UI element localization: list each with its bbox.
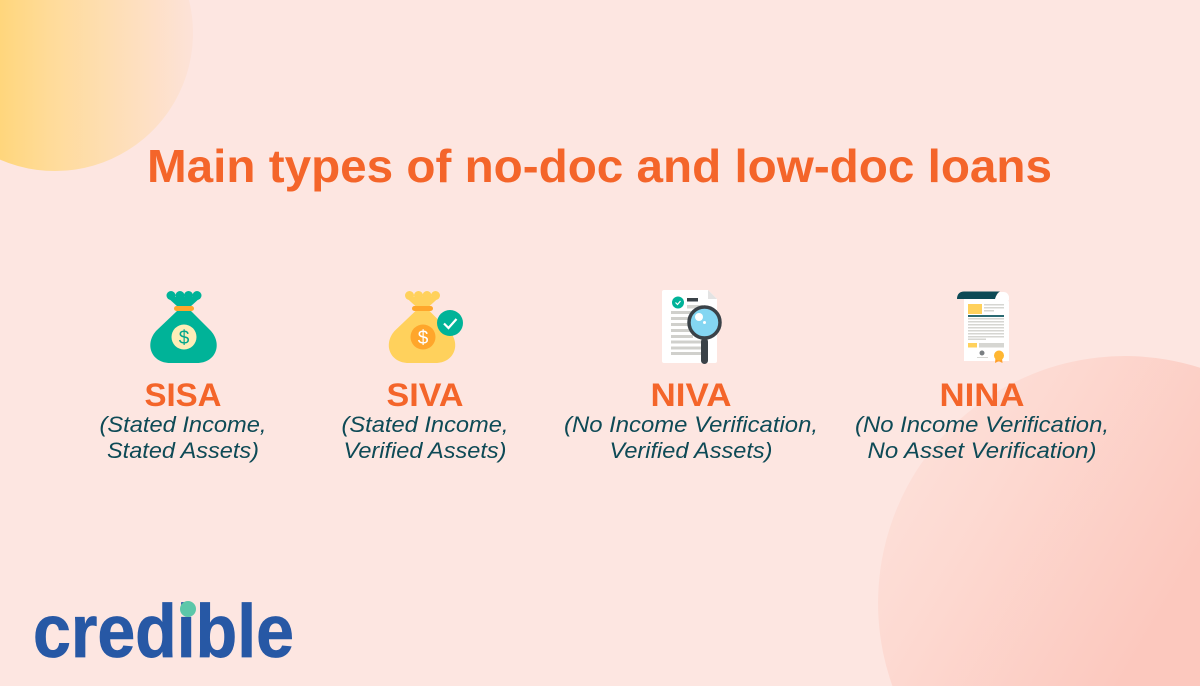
description: SIVA: Verified Assets) (344, 438, 506, 463)
icon: yellow money bag with check: $ (418, 328, 429, 349)
icon: green money bag: $ (179, 328, 190, 349)
description: NIVA (564, 412, 818, 463)
description: NIVA: (No Income Verification, (564, 412, 818, 437)
label: NINA: NINA (940, 377, 1024, 413)
icon: green money bag (150, 291, 217, 363)
description: NINA: (No Income Verification, (855, 412, 1109, 437)
description: NIVA: Verified Assets) (610, 438, 772, 463)
label: SISA: SISA (144, 377, 222, 413)
icon: certificate document (957, 292, 1009, 363)
icon: document with magnifying glass (662, 290, 720, 364)
description: SISA: (Stated Income, (100, 412, 266, 437)
description: NINA (855, 412, 1109, 463)
description: SIVA: (Stated Income, (342, 412, 508, 437)
description: SISA (100, 412, 266, 463)
logo dot (180, 601, 196, 617)
column: NINA (855, 292, 1109, 463)
icon: yellow money bag with check (389, 291, 463, 363)
decorative circle: top left (0, 0, 193, 171)
description: NINA: No Asset Verification) (868, 438, 1096, 463)
logo: credible: credible (33, 589, 294, 673)
description: SIVA (342, 412, 508, 463)
column: NIVA (564, 290, 818, 463)
title: Main types of no-doc and low-doc loans (147, 140, 1052, 192)
description: SISA: Stated Assets) (107, 438, 259, 463)
column: SIVA (342, 291, 508, 463)
label: NIVA: NIVA (650, 377, 732, 413)
decorative circle: bottom right (878, 356, 1200, 686)
label: SIVA: SIVA (386, 377, 464, 413)
column: SISA (100, 291, 266, 463)
